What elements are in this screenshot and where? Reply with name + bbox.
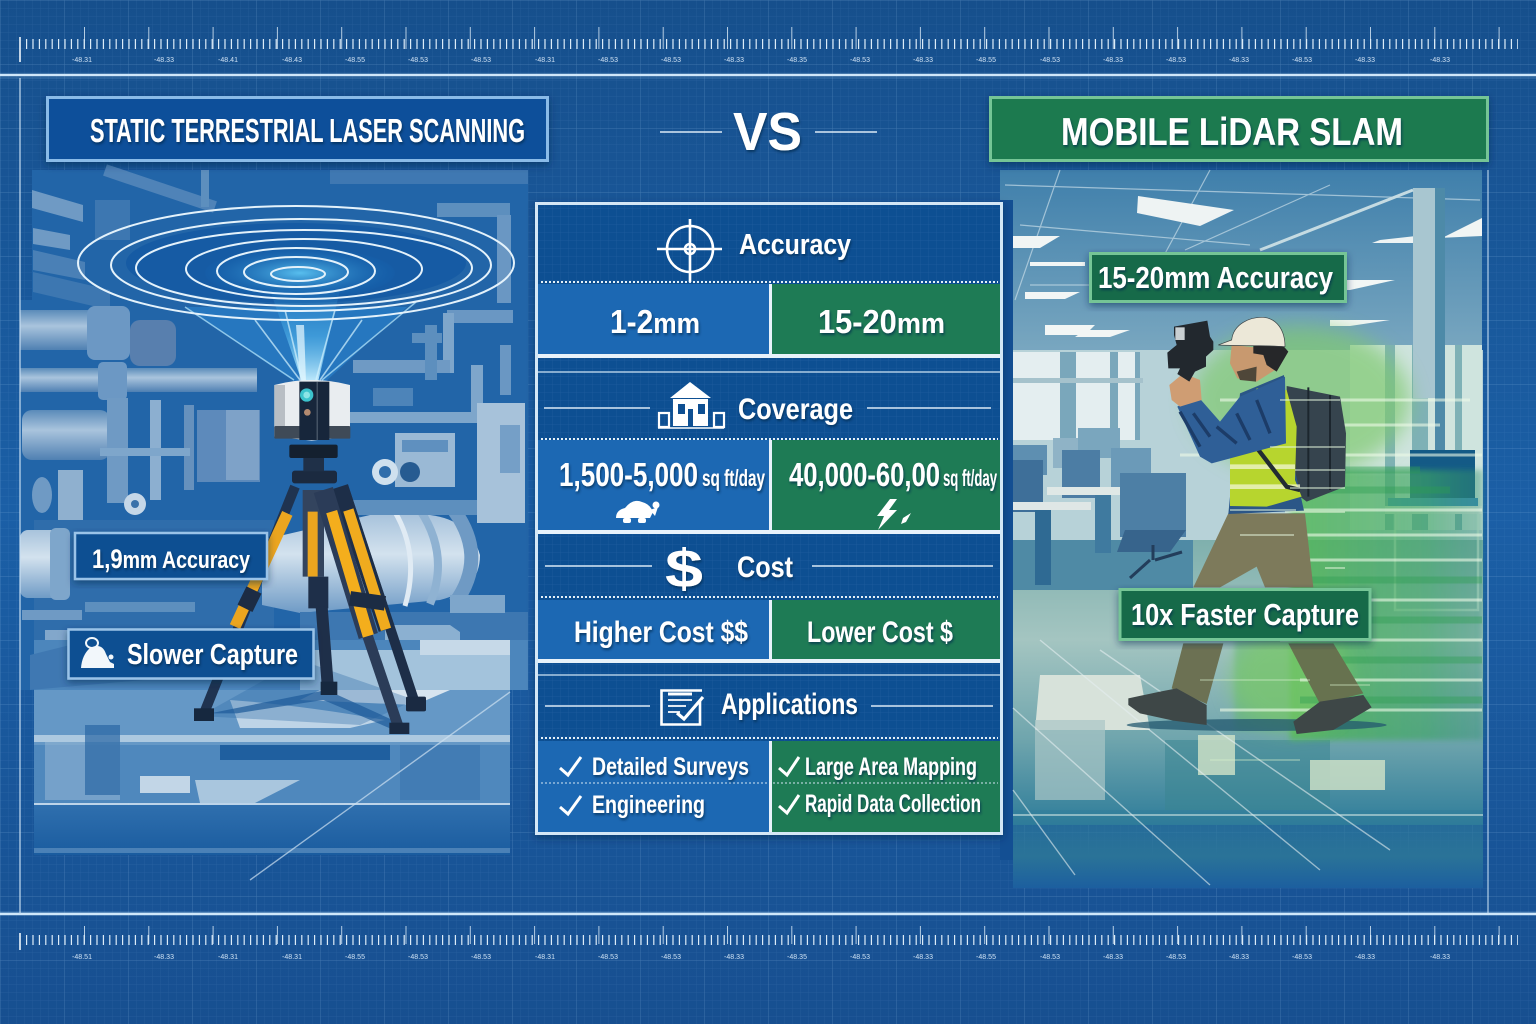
handheld scanner (1167, 321, 1213, 382)
left ruler scale: -48.43 (282, 57, 302, 64)
row: cost: Higher Cost $$ (574, 616, 748, 649)
icon: target (657, 219, 722, 282)
heading: mobile LiDAR SLAM: MOBILE LiDAR SLAM (1061, 111, 1403, 154)
bottom ruler scale: -48.55 (976, 954, 996, 961)
bottom ruler scale: -48.33 (724, 954, 744, 961)
left ruler scale: -48.33 (1103, 57, 1123, 64)
head (1230, 345, 1282, 382)
row: coverage: 1,500-5,000 (559, 456, 698, 493)
left ruler scale: -48.33 (724, 57, 744, 64)
row: coverage (538, 372, 1000, 532)
bottom ruler scale: -48.31 (535, 954, 555, 961)
foot shadow (1127, 719, 1387, 731)
icon: lightning bolt (877, 499, 911, 530)
left ruler scale: -48.55 (976, 57, 996, 64)
icon: dollar sign: $ (665, 539, 703, 599)
row: cost (538, 539, 1000, 661)
trousers (1193, 513, 1313, 587)
bottom ruler scale: -48.53 (598, 954, 618, 961)
left ruler scale: -48.41 (218, 57, 238, 64)
callout: slower capture: Slower Capture (127, 639, 298, 671)
panel: static scan scene (20, 170, 528, 880)
bottom ruler scale: -48.31 (282, 954, 302, 961)
illustration: laser scanner on tripod (194, 380, 426, 734)
icon: clipboard check (662, 690, 703, 724)
bottom ruler scale: -48.33 (154, 954, 174, 961)
tripod legs (203, 487, 417, 732)
floor shadows (210, 690, 400, 728)
bottom ruler scale: -48.33 (1103, 954, 1123, 961)
big horizontal vessel (262, 515, 480, 613)
heading: VS divider: VS (733, 102, 802, 162)
icon: check (560, 757, 799, 814)
floor (34, 640, 528, 690)
left ruler scale: -48.33 (1355, 57, 1375, 64)
callout: 1.9mm accuracy: 1,9mm Accuracy (92, 544, 251, 574)
big pipes (20, 310, 110, 350)
left ruler scale: -48.53 (408, 57, 428, 64)
background pipework (105, 170, 215, 207)
panel: comparison table (536, 204, 1002, 834)
callout: 15-20mm accuracy: 15-20mm Accuracy (1098, 260, 1334, 295)
bottom ruler scale: -48.33 (1430, 954, 1450, 961)
bottom ruler scale: -48.35 (787, 954, 807, 961)
bottom ruler scale: -48.53 (661, 954, 681, 961)
bottom ruler scale: -48.31 (218, 954, 238, 961)
row: accuracy (538, 219, 1000, 356)
row: applications: Rapid Data Collection (805, 790, 981, 818)
row: coverage: sq ft/day (943, 465, 997, 491)
icon: weight (81, 638, 114, 668)
scanner head (274, 380, 350, 441)
callout: 10x faster capture (1120, 590, 1370, 640)
row: cost: Lower Cost $ (807, 616, 953, 649)
row: accuracy: Accuracy (739, 229, 851, 261)
hard hat (1218, 317, 1285, 347)
desks and chairs (1013, 445, 1047, 475)
frame lines (20, 78, 1488, 914)
left ruler scale: -48.55 (345, 57, 365, 64)
row: cost: Cost (737, 551, 793, 584)
row: applications (538, 675, 1000, 832)
bottom ruler scale: -48.53 (1292, 954, 1312, 961)
callout: 10x faster capture: 10x Faster Capture (1131, 597, 1359, 632)
left ruler scale: -48.33 (1430, 57, 1450, 64)
heading: mobile LiDAR SLAM (990, 98, 1488, 160)
row: applications: Large Area Mapping (805, 753, 977, 781)
left ruler scale: -48.31 (72, 57, 92, 64)
boots (1128, 688, 1207, 725)
row: coverage: 40,000-60,00 (789, 456, 940, 493)
row: accuracy: 15-20mm (818, 303, 945, 340)
green motion streaks (1180, 325, 1483, 740)
raised arm (1177, 377, 1286, 463)
bottom ruler scale: -48.51 (72, 954, 92, 961)
heading: static terrestrial laser scanning: STATIC TERRESTRIAL LASER SCANNING (90, 112, 525, 149)
scan rings with laser beam (78, 206, 514, 382)
bottom ruler scale: -48.53 (850, 954, 870, 961)
row: coverage: sq ft/day (702, 465, 765, 491)
torso and jacket (1228, 375, 1304, 514)
callout: 15-20mm accuracy (1090, 254, 1346, 302)
left ruler scale: -48.33 (1229, 57, 1249, 64)
left ruler scale: -48.31 (535, 57, 555, 64)
mid level machinery (34, 520, 274, 640)
left ruler scale: -48.53 (850, 57, 870, 64)
left ruler scale: -48.53 (598, 57, 618, 64)
left ruler scale: -48.33 (154, 57, 174, 64)
row: applications: Detailed Surveys (592, 753, 749, 781)
speed streaks over figure (1200, 400, 1370, 760)
bottom ruler scale: -48.33 (1229, 954, 1249, 961)
backpack (1287, 386, 1346, 502)
callout: 1.9mm accuracy (75, 533, 267, 579)
left ruler scale: -48.33 (913, 57, 933, 64)
row: accuracy: 1-2mm (610, 303, 700, 340)
left ruler scale: -48.53 (1292, 57, 1312, 64)
heading: static terrestrial laser scanning (48, 98, 548, 160)
bottom ruler scale: -48.53 (408, 954, 428, 961)
icon: turtle (616, 501, 660, 523)
row: applications: Applications (721, 688, 858, 721)
bottom ruler scale: -48.53 (471, 954, 491, 961)
bottom ruler scale: -48.33 (913, 954, 933, 961)
bottom ruler scale (0, 914, 1536, 961)
windows (1013, 350, 1483, 540)
bottom ruler scale: -48.55 (345, 954, 365, 961)
bottom ruler scale: -48.53 (1040, 954, 1060, 961)
side band (1000, 200, 1013, 860)
hand (1169, 373, 1202, 407)
row: coverage: Coverage (738, 393, 853, 426)
control unit (395, 433, 455, 487)
panel: SLAM office scene (1000, 170, 1483, 888)
bottom ruler scale: -48.33 (1355, 954, 1375, 961)
left ruler scale (0, 37, 1536, 75)
left ruler scale: -48.53 (1040, 57, 1060, 64)
hi-vis vest (1230, 388, 1302, 507)
ceiling grid and lights (1005, 170, 1480, 300)
icon: building (658, 382, 724, 428)
left ruler scale: -48.35 (787, 57, 807, 64)
left ruler scale: -48.53 (1166, 57, 1186, 64)
row: applications: Engineering (592, 791, 705, 819)
left ruler scale: -48.53 (661, 57, 681, 64)
floor (1013, 540, 1483, 825)
illustration: surveyor walking with handheld scanner (1127, 317, 1387, 734)
bottom ruler scale: -48.53 (1166, 954, 1186, 961)
callout: slower capture (68, 630, 314, 678)
left ruler scale: -48.53 (471, 57, 491, 64)
